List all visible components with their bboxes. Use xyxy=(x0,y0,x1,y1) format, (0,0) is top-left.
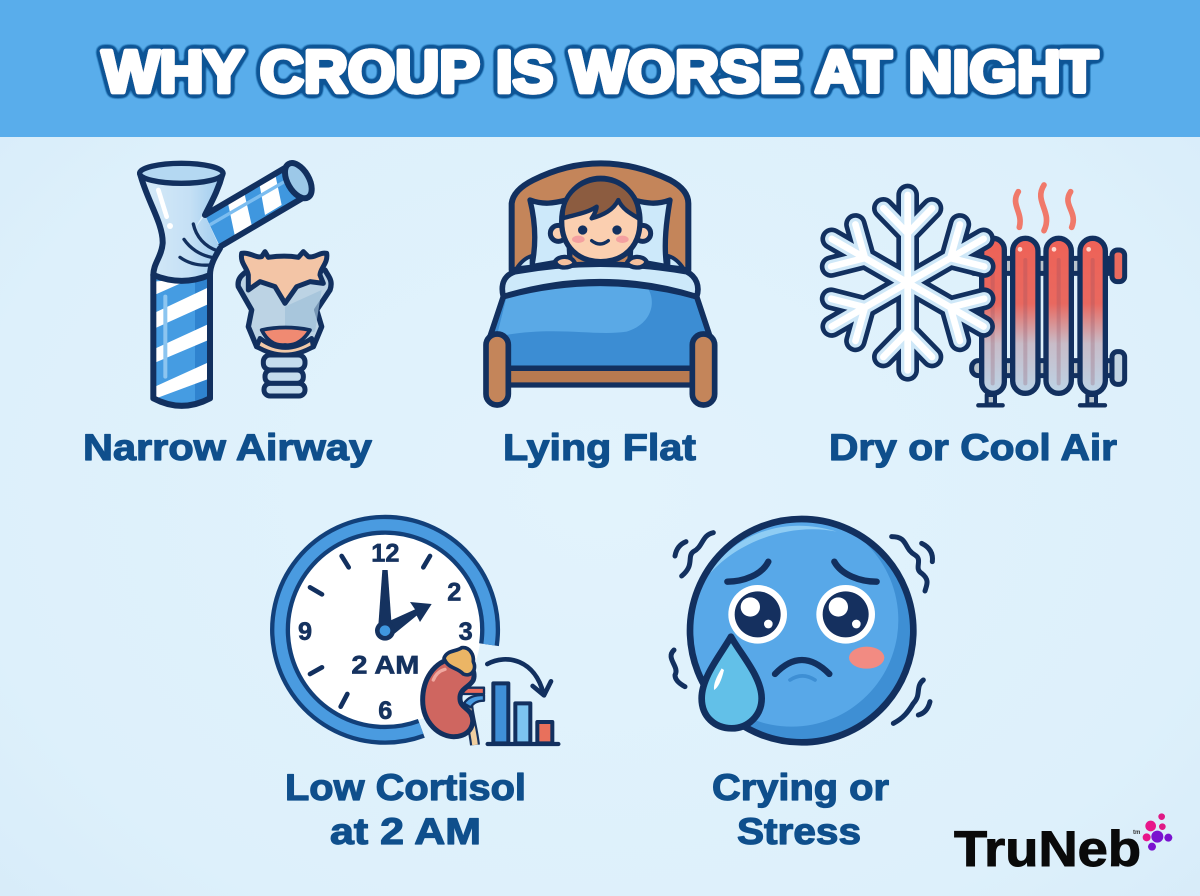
header band xyxy=(0,0,1200,137)
icon: radiator xyxy=(972,238,1125,405)
clock: 12 xyxy=(371,540,399,568)
label: lying flat: Lying Flat xyxy=(503,427,696,468)
logo: TruNeb xyxy=(954,813,1172,877)
clock: 6 xyxy=(378,697,392,725)
icon: snowflake xyxy=(820,195,996,370)
label: low cortisol at 2 AM: at 2 AM xyxy=(330,811,481,852)
icon: airway tube and larynx xyxy=(140,159,331,408)
icon: worried crying face xyxy=(671,513,933,742)
panel: low cortisol xyxy=(280,525,558,852)
label: narrow airway: Narrow Airway xyxy=(83,427,372,468)
shake lines xyxy=(671,533,933,723)
logo: TruNeb: tm xyxy=(1133,830,1140,836)
falling bar chart xyxy=(487,659,558,744)
panel: crying or stress xyxy=(671,513,933,852)
panel: dry or cool air xyxy=(820,185,1125,468)
kidney and adrenal xyxy=(423,648,484,745)
title: WHY CROUP IS WORSE AT NIGHT xyxy=(102,39,1098,105)
tear drop xyxy=(702,637,762,728)
label: dry or cool air: Dry or Cool Air xyxy=(829,427,1117,468)
clock xyxy=(280,525,490,735)
icon: child in bed xyxy=(486,163,715,405)
label: low cortisol at 2 AM: Low Cortisol xyxy=(285,767,526,808)
icon: clock with kidney and falling bars xyxy=(280,525,558,745)
icon: snowflake and radiator xyxy=(820,185,1125,405)
icon: steam xyxy=(1016,185,1073,231)
label: crying or stress: Crying or xyxy=(712,767,889,808)
label: crying or stress: Stress xyxy=(737,811,861,852)
clock: 3 xyxy=(459,618,473,646)
panel: narrow airway xyxy=(83,159,372,468)
clock: 2 xyxy=(447,579,461,607)
clock: 2 AM xyxy=(351,651,419,679)
logo dots xyxy=(1143,813,1172,851)
clock: 9 xyxy=(298,618,312,646)
logo: TruNeb: TruNeb xyxy=(954,821,1141,877)
panel: lying flat xyxy=(486,163,715,468)
